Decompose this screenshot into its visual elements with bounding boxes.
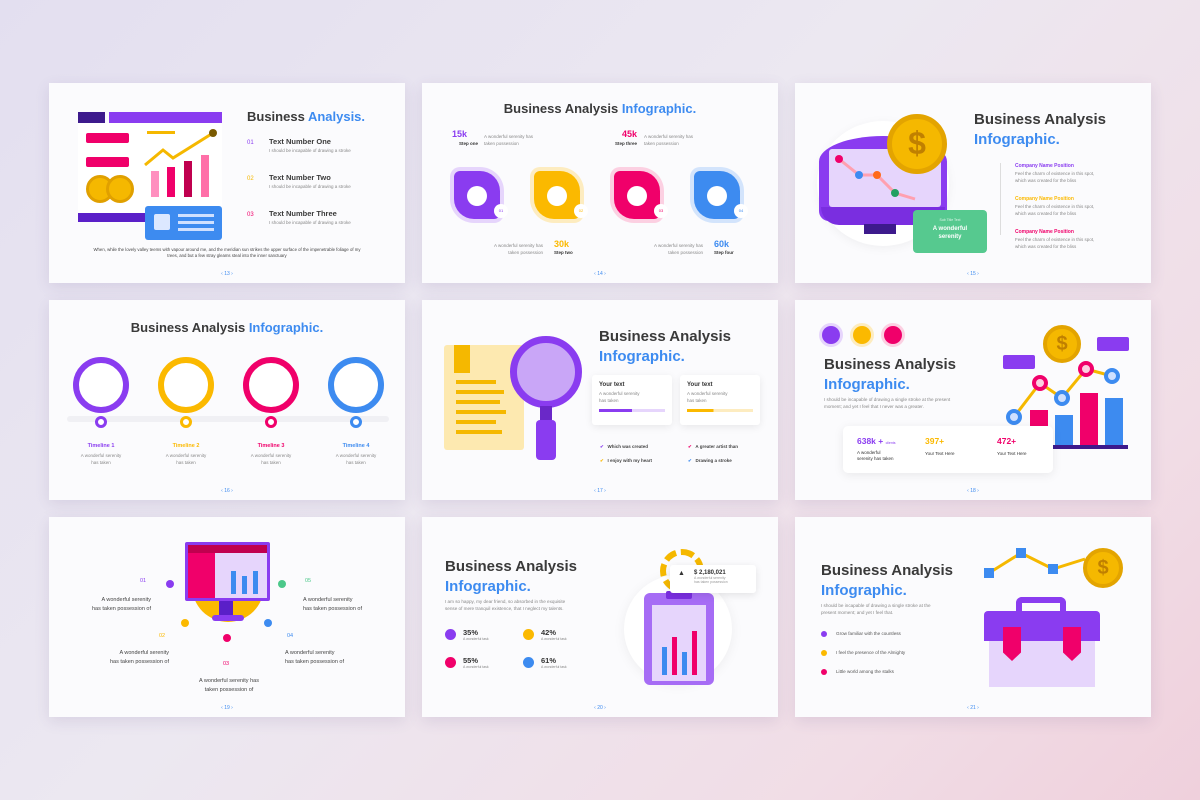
slide 2: steps — [422, 83, 778, 283]
bullet list: I feel the presence of the Almighty — [836, 650, 905, 655]
list items: Text Number Two — [269, 173, 331, 182]
stats card: 397+ — [925, 436, 944, 446]
labels: 05 — [305, 578, 311, 584]
labels: A wonderful serenity has — [199, 678, 259, 684]
step shapes: 02 — [579, 208, 583, 213]
cards: has taken — [687, 398, 707, 403]
list items: 01 — [247, 140, 254, 146]
stats: 35% — [463, 628, 478, 637]
cards: Your text — [599, 382, 625, 388]
labels: A wonderful serenity — [303, 597, 353, 603]
positions list: which was created for the bliss — [1015, 211, 1076, 216]
dots — [166, 580, 272, 642]
list items: I should be incapable of drawing a stroke — [269, 220, 351, 225]
stats — [445, 628, 567, 669]
checklist: ✔ A greater artist than — [688, 444, 738, 449]
labels: has taken possession of — [303, 606, 362, 612]
illustration: phone: $ 2,180,021 — [694, 570, 726, 576]
checklist — [600, 444, 738, 463]
slide 1: Business Analysis — [49, 83, 405, 283]
title: Infographic. — [974, 130, 1060, 148]
stats: A wonderful task — [541, 665, 567, 669]
title: Infographic. — [824, 376, 910, 392]
step labels: 15k — [452, 129, 467, 139]
positions list: which was created for the bliss — [1015, 244, 1076, 249]
title — [824, 356, 956, 392]
timeline labels: Timeline 3 — [258, 443, 284, 449]
positions list: Company Name Position — [1015, 196, 1074, 202]
list items: 02 — [247, 176, 254, 182]
slide 8: phone chart — [422, 517, 778, 717]
title: Infographic. — [821, 582, 907, 598]
checklist: ✔ Which was created — [600, 444, 648, 449]
step shapes: 01 — [499, 208, 503, 213]
labels: 04 — [287, 633, 293, 639]
labels: has taken possession of — [110, 659, 169, 665]
slide 2: steps: taken possession — [484, 141, 519, 146]
title: Infographic. — [599, 348, 685, 364]
icons row — [819, 323, 905, 347]
slide 3: monitor: ‹ 15 › — [967, 271, 979, 277]
slide 6: chart — [795, 300, 1151, 500]
illustration: monitor with coin — [819, 114, 987, 253]
list items: Text Number One — [269, 137, 331, 146]
slide 2: steps: Step four — [714, 250, 734, 255]
positions list: which was created for the bliss — [1015, 178, 1076, 183]
title — [974, 111, 1106, 148]
slide 2: steps: Step two — [554, 250, 573, 255]
list items: I should be incapable of drawing a stroke — [269, 184, 351, 189]
checklist: ✔ Drawing a stroke — [688, 458, 732, 463]
list items: I should be incapable of drawing a stroke — [269, 148, 351, 153]
chart illustration — [1003, 325, 1129, 449]
title — [445, 558, 577, 594]
title: Business Analysis — [824, 356, 956, 373]
cards — [592, 382, 760, 428]
illustration: document and magnifier — [444, 336, 582, 460]
stats: A wonderful task — [541, 637, 567, 641]
step shapes — [450, 167, 744, 223]
timeline labels: Timeline 1 — [88, 443, 114, 449]
timeline circles — [67, 357, 389, 428]
illustration: briefcase — [984, 548, 1123, 687]
timeline labels: A wonderful serenity — [251, 453, 291, 458]
timeline labels: Timeline 4 — [343, 443, 369, 449]
slide 2: steps: taken possession — [644, 141, 679, 146]
list items: 03 — [247, 212, 254, 218]
slide 2: steps: A wonderful serenity has — [494, 243, 543, 248]
illustration: monitor — [185, 542, 270, 622]
stats card: 638k + clients — [857, 436, 896, 446]
positions list — [1000, 163, 1094, 249]
title: Business Analysis Infographic. — [504, 101, 696, 116]
bullet list: Little world among the stalks — [836, 669, 894, 674]
slide 9: briefcase: present moment; and yet I feel that. — [821, 610, 893, 615]
slide 5: magnifier — [422, 300, 778, 500]
stats card: Your Text Here — [997, 451, 1027, 456]
slide 2: steps: A wonderful serenity has — [644, 134, 693, 139]
timeline labels: has taken — [91, 460, 111, 465]
illustration: phone: has taken possession — [694, 580, 728, 584]
labels: 01 — [140, 578, 146, 584]
stats: A wonderful task — [463, 665, 489, 669]
slide 2: steps: taken possession — [668, 250, 703, 255]
title: Infographic. — [445, 578, 531, 594]
slide 8: phone chart: sense of mere tranquil existence, that I neglect my talents. — [445, 606, 563, 611]
slide 2: steps: A wonderful serenity has — [484, 134, 533, 139]
slide 1: Business Analysis: ‹ 13 › — [221, 271, 233, 277]
slide 2: steps: 60k — [714, 239, 729, 249]
step shapes: 04 — [739, 208, 743, 213]
labels — [92, 578, 362, 693]
illustration: monitor with coin: Sub Title Text — [940, 218, 960, 222]
stats: A wonderful task — [463, 637, 489, 641]
illustration: monitor with coin: A wonderful — [933, 226, 967, 232]
title: Business Analysis — [821, 562, 953, 579]
bullet list: Grow familiar with the countless — [836, 631, 901, 636]
stats card: 472+ — [997, 436, 1016, 446]
slide 3: monitor — [795, 83, 1151, 283]
slide 7: radial monitor: ‹ 19 › — [221, 705, 233, 711]
slide 2: steps: 45k — [622, 129, 637, 139]
illustration: dashboard — [78, 112, 222, 240]
labels: A wonderful serenity — [285, 650, 335, 656]
labels: has taken possession of — [92, 606, 151, 612]
timeline labels: has taken — [346, 460, 366, 465]
slide 2: steps: 30k — [554, 239, 569, 249]
illustration: phone — [644, 549, 758, 685]
labels: A wonderful serenity — [119, 650, 169, 656]
timeline labels: A wonderful serenity — [81, 453, 121, 458]
labels: has taken possession of — [285, 659, 344, 665]
title — [599, 328, 731, 364]
stats card: Your Text Here — [925, 451, 955, 456]
illustration: briefcase: $ — [1097, 557, 1109, 579]
slide 6: chart: ‹ 18 › — [967, 488, 979, 494]
slide 9: briefcase: ‹ 21 › — [967, 705, 979, 711]
list items: Text Number Three — [269, 209, 337, 218]
title: Business Analysis — [445, 558, 577, 575]
title: Business Analysis. — [247, 109, 365, 124]
positions list: Feel the charm of existence in this spot, — [1015, 171, 1094, 176]
cards: A wonderful serenity — [599, 391, 640, 396]
title — [821, 562, 953, 598]
step shapes: 03 — [659, 208, 663, 213]
slide 8: phone chart: I am so happy, my dear friend, so absorbed in the exquisite — [445, 599, 565, 604]
stats: 55% — [463, 656, 478, 665]
slide 2: steps: taken possession — [508, 250, 543, 255]
positions list: Feel the charm of existence in this spot, — [1015, 204, 1094, 209]
title: Business Analysis — [599, 328, 731, 345]
labels: 03 — [223, 661, 229, 667]
stats: 42% — [541, 628, 556, 637]
slide 9: briefcase: I should be incapable of drawing a single stroke at the — [821, 603, 931, 608]
slide 6: chart: moment; and yet I feel that I never was a greater. — [824, 404, 924, 409]
footer text: When, while the lovely valley teems with vapour around me, and the meridian sun strikes the upper surface of the impenetrable foliage of my trees, and but a few stray gleams steal into the inner sanctuary — [93, 247, 361, 258]
slide 9: briefcase — [795, 517, 1151, 717]
slide 7: radial monitor — [49, 517, 405, 717]
stats: 61% — [541, 656, 556, 665]
chart illustration: $ — [1056, 333, 1068, 355]
timeline labels: A wonderful serenity — [166, 453, 206, 458]
illustration: monitor with coin: serenity — [938, 234, 962, 240]
list items — [247, 137, 351, 225]
positions list: Company Name Position — [1015, 229, 1074, 235]
slide 5: magnifier: ‹ 17 › — [594, 488, 606, 494]
cards: A wonderful serenity — [687, 391, 728, 396]
timeline labels: has taken — [176, 460, 196, 465]
timeline labels — [80, 443, 376, 465]
timeline labels: A wonderful serenity — [336, 453, 376, 458]
positions list: Feel the charm of existence in this spot, — [1015, 237, 1094, 242]
labels: A wonderful serenity — [101, 597, 151, 603]
labels: 02 — [159, 633, 165, 639]
slide 6: chart: I should be incapable of drawing a single stroke at the present — [824, 397, 950, 402]
slide 2: steps: Step three — [615, 141, 637, 146]
slide 2: steps: Step one — [459, 141, 478, 146]
cards: Your text — [687, 382, 713, 388]
cards: has taken — [599, 398, 619, 403]
title: Business Analysis Infographic. — [131, 320, 323, 335]
stats card: A wonderful — [857, 450, 881, 455]
slide 2: steps: ‹ 14 › — [594, 271, 606, 277]
slide 2: steps: A wonderful serenity has — [654, 243, 703, 248]
positions list: Company Name Position — [1015, 163, 1074, 169]
timeline labels: has taken — [261, 460, 281, 465]
illustration: phone: A wonderful serenity — [694, 576, 726, 580]
timeline labels: Timeline 2 — [173, 443, 199, 449]
slide 4: timeline — [49, 300, 405, 500]
title: Business Analysis — [974, 111, 1106, 128]
bullet list — [821, 631, 906, 675]
checklist: ✔ I enjoy with my heart — [600, 458, 652, 463]
illustration: monitor with coin: $ — [908, 125, 926, 161]
slide 8: phone chart: ‹ 20 › — [594, 705, 606, 711]
slide 4: timeline: ‹ 16 › — [221, 488, 233, 494]
labels: taken possession of — [205, 687, 253, 693]
illustration: phone: ▲ — [678, 570, 685, 577]
stats card: serenity has taken — [857, 456, 894, 461]
stats card — [843, 426, 1053, 473]
